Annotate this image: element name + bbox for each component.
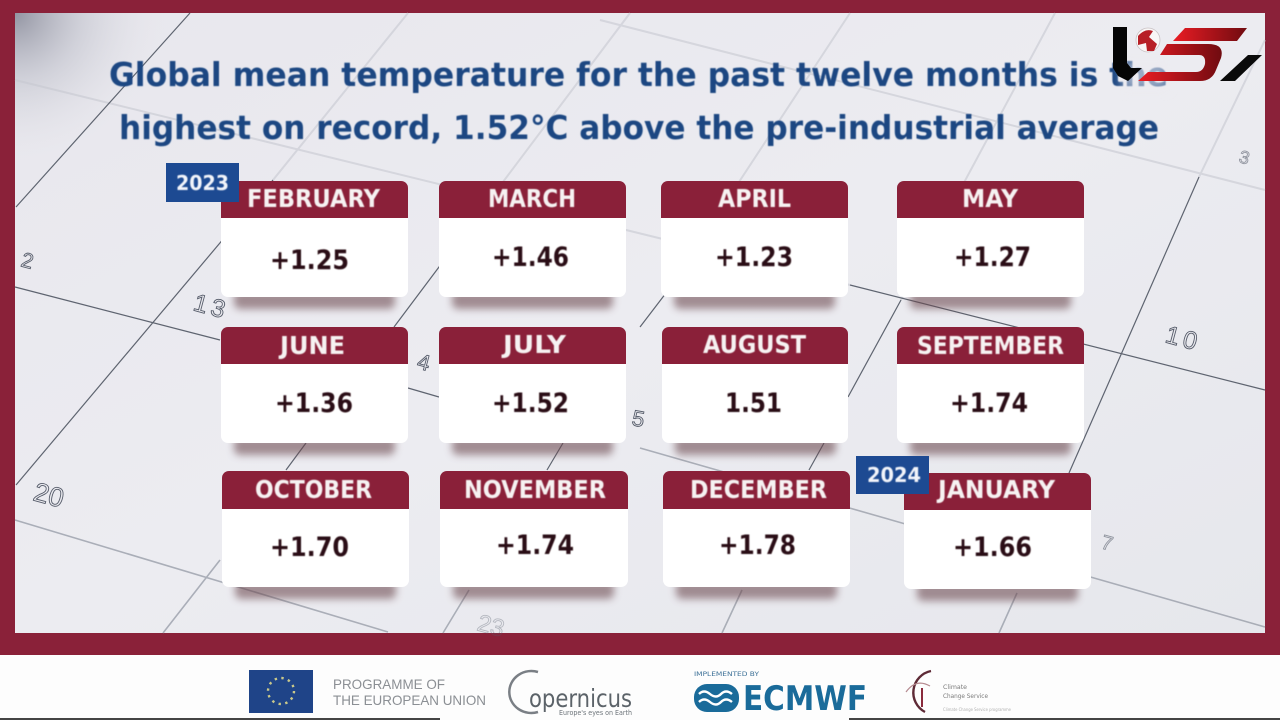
card: June: +1.36 — [275, 388, 353, 419]
card: January 2024: +1.66 — [953, 532, 1032, 563]
calendar photo background: 3 — [1237, 147, 1252, 168]
ECMWF logo — [694, 671, 867, 719]
EU programme text: THE EUROPEAN UNION — [333, 692, 486, 708]
Copernicus logo: opernicus — [529, 684, 632, 713]
card: April: APRIL — [718, 184, 791, 213]
year tag 2024: 2024 — [867, 463, 921, 487]
Climate Change Service logo: Climate Change Service programme — [943, 707, 1011, 712]
calendar photo background: 4 — [415, 349, 433, 376]
card: February 2023 — [221, 181, 408, 309]
calendar photo background: 5 — [630, 405, 647, 432]
title: highest on record, 1.52°C above the pre-industrial average — [119, 108, 1159, 147]
card: June — [221, 327, 408, 455]
card: April — [661, 181, 848, 309]
card: November: +1.74 — [496, 530, 574, 561]
year tag 2023: 2023 — [176, 171, 229, 195]
card: November — [440, 471, 628, 599]
card: January 2024: JANUARY — [936, 475, 1056, 504]
card: March — [439, 181, 626, 309]
card: May: MAY — [962, 184, 1019, 213]
card: June: JUNE — [278, 331, 345, 360]
calendar photo background: 20 — [30, 477, 67, 514]
card: July — [439, 327, 626, 455]
card: February 2023: +1.25 — [270, 245, 349, 276]
card: March: +1.46 — [492, 242, 569, 273]
EU programme text: PROGRAMME OF — [333, 676, 445, 692]
card: December — [663, 471, 850, 599]
card: April: +1.23 — [715, 242, 793, 273]
card: August: 1.51 — [725, 388, 782, 419]
ECMWF logo: ECMWF — [743, 679, 867, 719]
year tag 2023 — [166, 163, 239, 202]
card: March: MARCH — [488, 184, 576, 213]
year tag 2024 — [856, 456, 929, 494]
card: August: AUGUST — [703, 330, 806, 359]
calendar photo background: 2 — [19, 249, 36, 274]
title — [109, 55, 1168, 147]
card: August — [662, 327, 848, 455]
card: October: OCTOBER — [255, 475, 372, 504]
calendar photo background: 10 — [1162, 321, 1204, 357]
card: December: +1.78 — [719, 530, 796, 561]
card: September — [897, 327, 1084, 455]
card: July: +1.52 — [492, 388, 569, 419]
card: September: SEPTEMBER — [917, 331, 1064, 360]
bottom dark edge — [0, 718, 1280, 720]
Copernicus logo — [509, 671, 632, 717]
calendar photo background: 7 — [1099, 532, 1115, 556]
card: October — [222, 471, 409, 599]
EU flag logo — [249, 670, 313, 713]
card: May — [897, 181, 1084, 309]
title: Global mean temperature for the past twelve months is the — [109, 55, 1168, 94]
card: September: +1.74 — [950, 388, 1028, 419]
calendar photo background: 23 — [474, 610, 507, 643]
EU programme text — [333, 676, 486, 708]
title haze under logo — [1122, 60, 1168, 90]
calendar photo background: 13 — [190, 289, 232, 325]
card: November: NOVEMBER — [464, 475, 606, 504]
footer band — [0, 655, 1280, 720]
card: December: DECEMBER — [690, 475, 827, 504]
card: January 2024 — [904, 473, 1091, 601]
ECMWF logo: IMPLEMENTED BY — [694, 671, 759, 678]
card: February 2023: FEBRUARY — [247, 184, 381, 213]
Climate Change Service logo: Change Service — [943, 692, 988, 700]
Copernicus logo: Europe's eyes on Earth — [559, 709, 632, 717]
card: July: JULY — [501, 330, 567, 359]
Climate Change Service logo — [906, 671, 1011, 712]
card: May: +1.27 — [954, 242, 1031, 273]
card: October: +1.70 — [270, 532, 349, 563]
broadcaster logo — [1113, 27, 1262, 81]
Climate Change Service logo: Climate — [943, 683, 967, 691]
